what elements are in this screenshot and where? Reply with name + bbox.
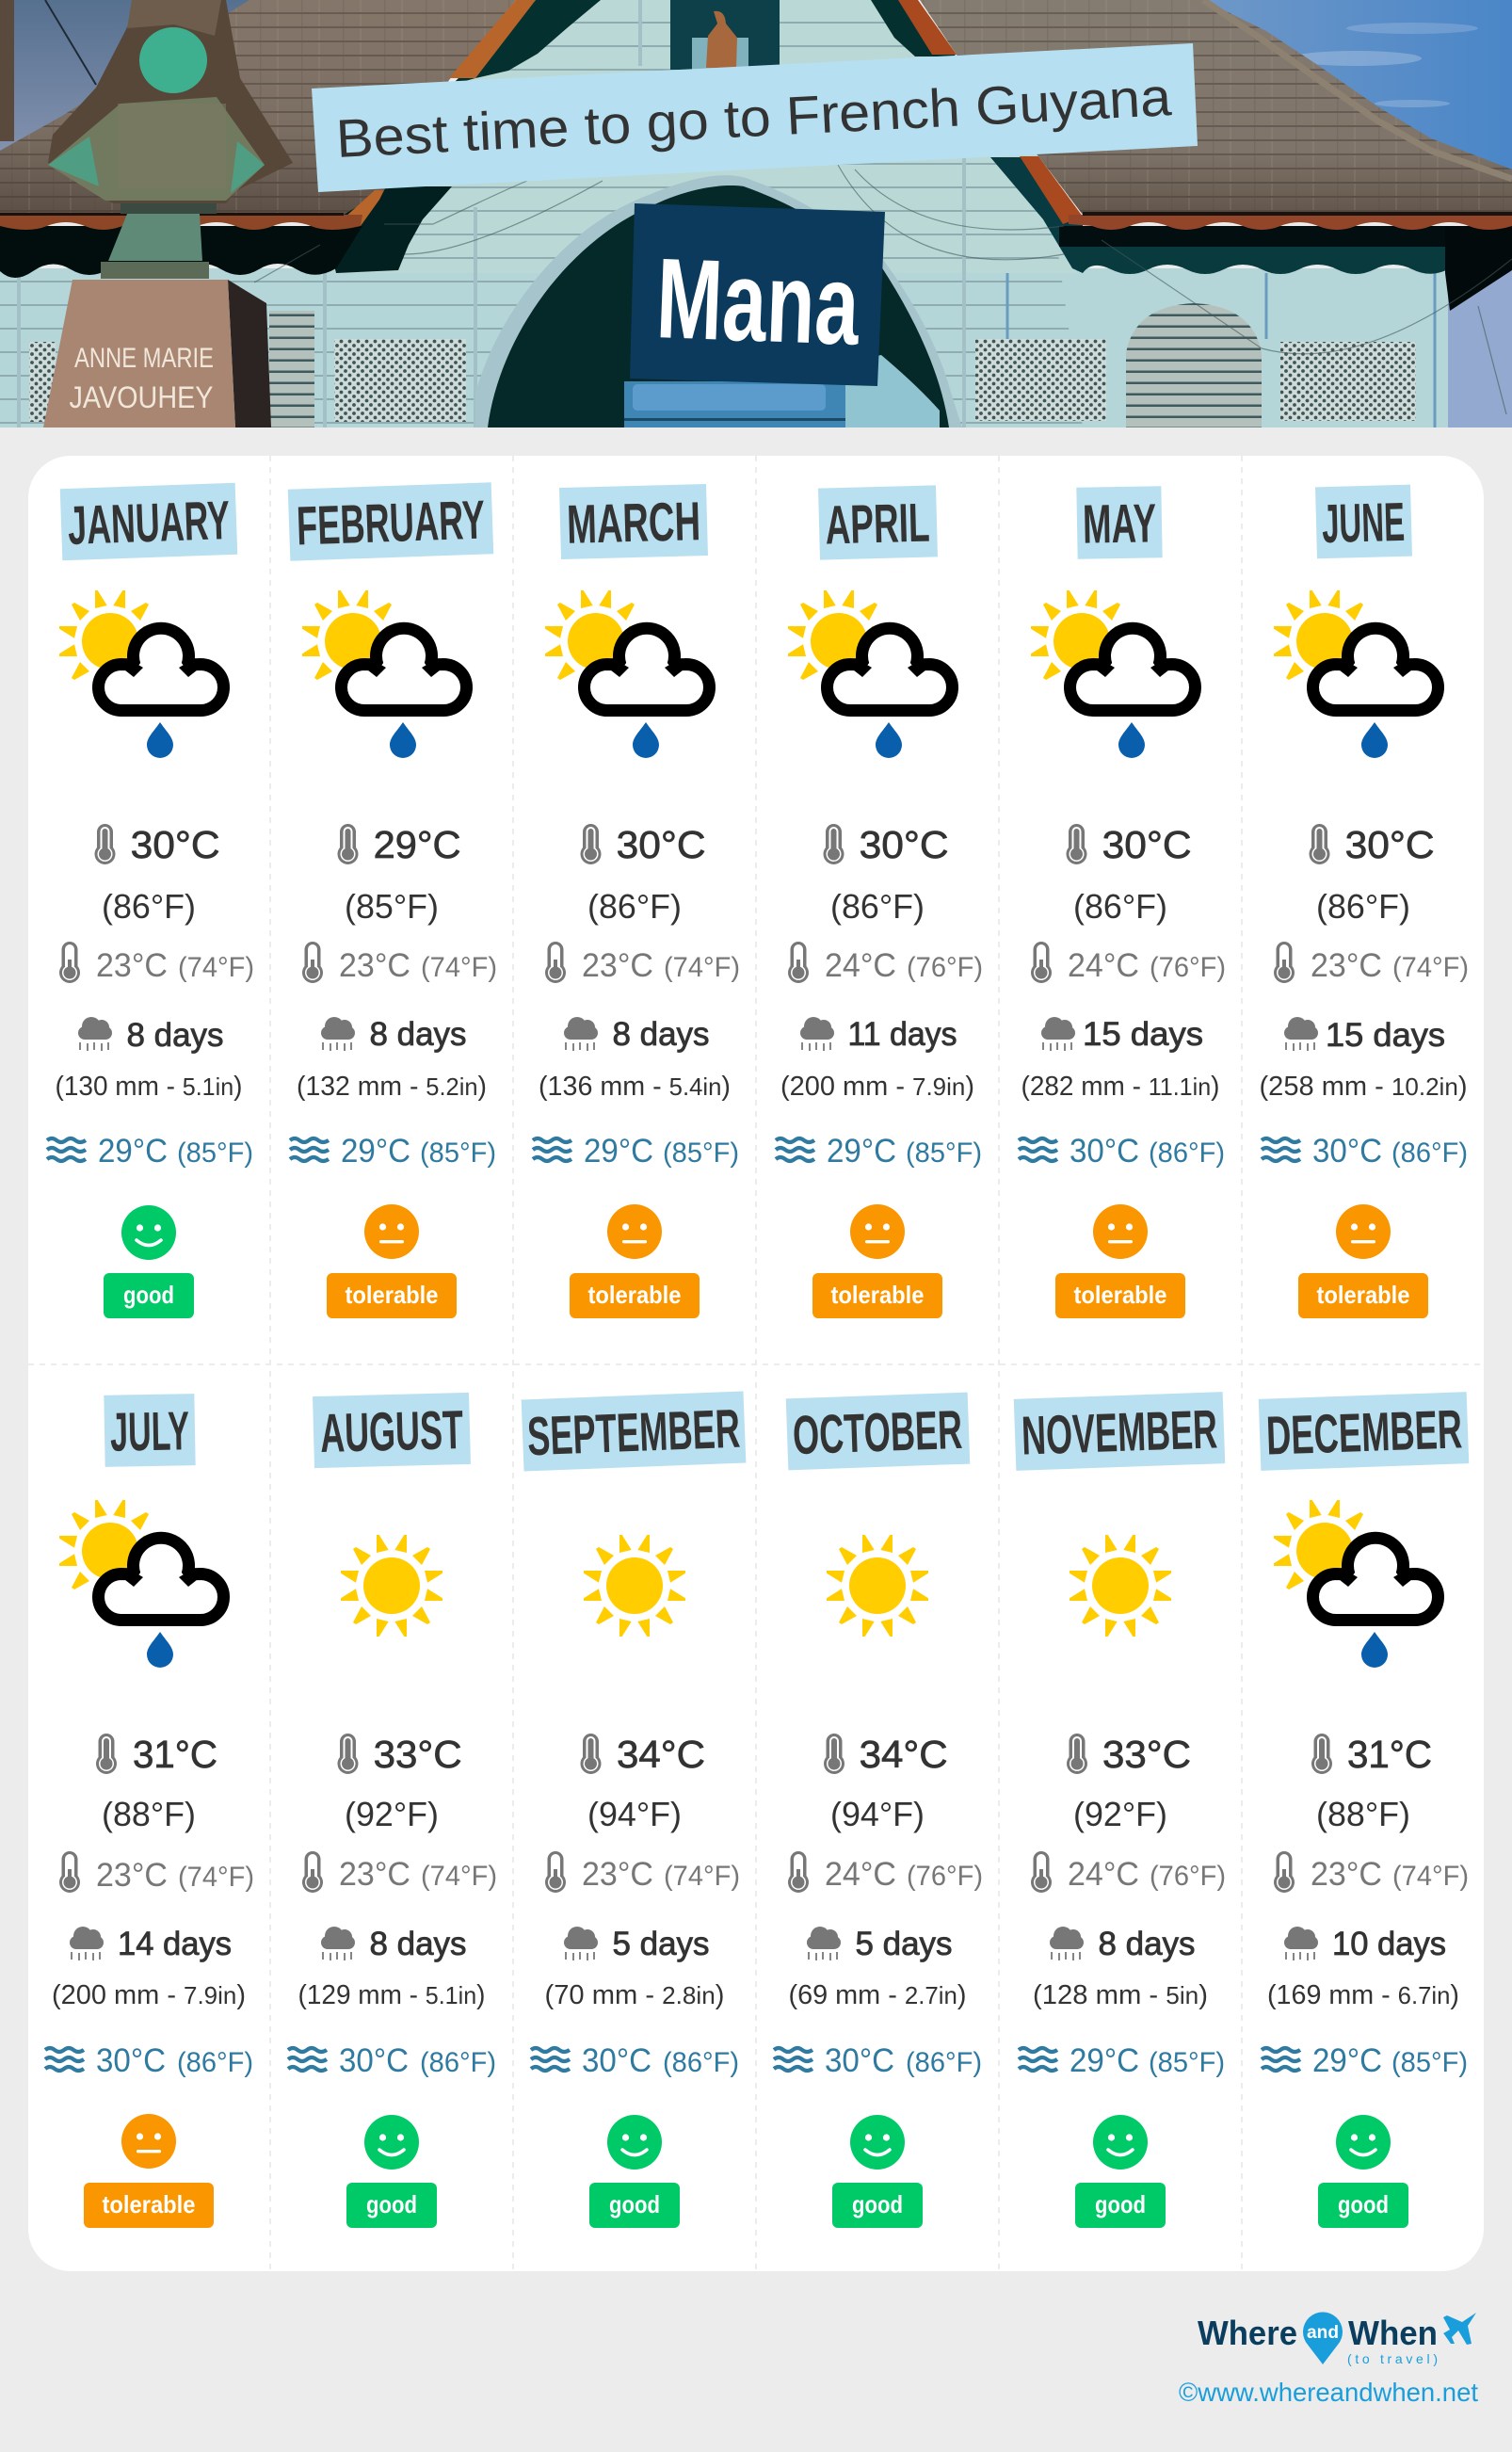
rain days: 8 days	[126, 1017, 224, 1054]
icon: sun	[1070, 1535, 1171, 1637]
sea temperature: 29°C	[341, 1133, 410, 1170]
low temperature: (74°F)	[664, 1861, 740, 1892]
sea temperature: (85°F)	[177, 1137, 253, 1169]
low temperature: (74°F)	[421, 952, 497, 983]
month: April	[776, 485, 983, 1318]
high temperature	[823, 823, 949, 926]
rain days	[321, 1926, 467, 1962]
rain days	[70, 1926, 232, 1962]
low temperature: 23°C	[582, 1856, 653, 1893]
header photo: church of Mana with statue: JAVOUHEY	[70, 380, 213, 414]
heading: March: MARCH	[566, 491, 701, 556]
high temperature: (86°F)	[102, 887, 196, 926]
rainfall: (69 mm - 2.7in)	[788, 1980, 966, 2010]
logo: Where and When: (to travel)	[1347, 2351, 1438, 2366]
low temperature: (74°F)	[178, 1862, 254, 1893]
heading: February	[288, 482, 493, 561]
sea temperature: (85°F)	[906, 1137, 982, 1169]
icon: sun	[584, 1535, 685, 1637]
heading: July	[104, 1394, 196, 1467]
heading: July: JULY	[109, 1400, 190, 1463]
sea temperature	[1262, 1133, 1468, 1170]
rainfall: (200 mm - 7.9in)	[52, 1980, 246, 2010]
location label: Mana: Mana	[654, 234, 862, 369]
low temperature	[545, 942, 740, 984]
sea temperature: (86°F)	[906, 2047, 982, 2078]
low temperature: 24°C	[1068, 1856, 1139, 1893]
rating: good	[104, 1205, 194, 1318]
logo: Where and When: When	[1348, 2314, 1438, 2352]
rain days: 15 days	[1083, 1016, 1203, 1053]
orange fascia	[344, 0, 536, 226]
heading: September: SEPTEMBER	[526, 1398, 741, 1467]
low temperature: 23°C	[339, 947, 410, 984]
month: August	[288, 1393, 497, 2228]
rating: tolerable	[327, 1204, 457, 1318]
rain days	[321, 1016, 467, 1053]
heading: February: FEBRUARY	[296, 490, 486, 557]
icon: sun, cloud and rain	[1031, 590, 1196, 758]
month: February	[288, 482, 497, 1318]
title banner: Best time to go to French Guyana	[334, 67, 1173, 169]
sea temperature: 30°C	[1312, 1133, 1382, 1170]
rainfall: (169 mm - 6.7in)	[1267, 1980, 1459, 2010]
header photo: church of Mana with statue	[0, 0, 1512, 427]
sea temperature	[531, 2042, 739, 2079]
high temperature: (85°F)	[345, 887, 439, 926]
sea temperature	[1019, 2042, 1225, 2079]
heading: May	[1076, 486, 1163, 559]
low temperature: 24°C	[1068, 947, 1139, 984]
logo: Where and When: Where	[1198, 2314, 1297, 2352]
icon: sun, cloud and rain	[1274, 590, 1439, 758]
high temperature: 30°C	[860, 823, 949, 866]
high temperature	[96, 1733, 217, 1833]
low temperature: (74°F)	[178, 952, 254, 983]
location label: Mana	[630, 203, 885, 386]
sea temperature: 29°C	[584, 1133, 653, 1170]
sea temperature: (86°F)	[420, 2047, 496, 2078]
logo: Where and When	[1198, 2312, 1476, 2366]
rain days: 11 days	[847, 1016, 957, 1053]
rating: good	[589, 2115, 680, 2228]
low temperature	[59, 942, 254, 984]
low temperature	[302, 942, 497, 984]
high temperature: (88°F)	[102, 1795, 196, 1833]
rating: tolerable	[570, 1204, 700, 1318]
high temperature	[94, 823, 220, 926]
heading: October	[786, 1393, 970, 1470]
sea temperature: 29°C	[1070, 2042, 1139, 2079]
month: January	[47, 483, 254, 1318]
rainfall: (136 mm - 5.4in)	[539, 1072, 731, 1102]
high temperature: (86°F)	[1316, 887, 1410, 926]
low temperature: (74°F)	[664, 952, 740, 983]
rain days	[78, 1017, 224, 1054]
icon: sun, cloud and rain	[788, 590, 953, 758]
sea temperature: 29°C	[1312, 2042, 1382, 2079]
month: November	[1014, 1392, 1226, 2228]
sea temperature: (85°F)	[1149, 2047, 1225, 2078]
sea temperature	[288, 2042, 496, 2079]
roofs	[0, 0, 516, 215]
rating: good	[346, 2115, 437, 2228]
heading: September	[522, 1391, 746, 1472]
heading: November: NOVEMBER	[1021, 1398, 1218, 1467]
high temperature: (94°F)	[830, 1795, 925, 1833]
rainfall: (258 mm - 10.2in)	[1260, 1072, 1467, 1102]
rain days: 5 days	[855, 1926, 953, 1962]
high temperature: 33°C	[1102, 1733, 1191, 1776]
high temperature	[580, 1733, 705, 1833]
high temperature: 34°C	[617, 1733, 705, 1776]
high temperature: (92°F)	[1073, 1795, 1167, 1833]
low temperature	[788, 942, 983, 984]
pedestal	[228, 280, 271, 427]
month: December	[1259, 1392, 1469, 2228]
sea temperature	[47, 1133, 253, 1170]
low temperature: (76°F)	[907, 952, 983, 983]
high temperature: (92°F)	[345, 1795, 439, 1833]
icon: plane	[1443, 2313, 1476, 2345]
icon: sun, cloud and rain	[545, 590, 710, 758]
high temperature: 30°C	[131, 823, 220, 866]
heading: August: AUGUST	[319, 1399, 464, 1464]
heading: April: APRIL	[825, 492, 930, 556]
high temperature: 31°C	[133, 1733, 217, 1776]
icon: map pin	[1303, 2312, 1343, 2364]
eave shadows	[0, 226, 362, 278]
low temperature	[1274, 942, 1469, 984]
low temperature	[545, 1851, 740, 1893]
high temperature: (86°F)	[1073, 887, 1167, 926]
windows	[334, 339, 466, 422]
low temperature: (74°F)	[1392, 952, 1469, 983]
arch and door	[475, 175, 962, 427]
high temperature: 30°C	[617, 823, 706, 866]
heading: October: OCTOBER	[792, 1399, 963, 1466]
rating: good	[1318, 2115, 1408, 2228]
low temperature: (74°F)	[1392, 1861, 1469, 1892]
low temperature	[59, 1851, 254, 1894]
low temperature: (76°F)	[1150, 952, 1226, 983]
sea temperature: (85°F)	[420, 1137, 496, 1169]
high temperature	[337, 1733, 462, 1833]
calendar card	[28, 456, 1484, 2271]
sea temperature	[774, 2042, 982, 2079]
low temperature	[302, 1851, 497, 1893]
month: September	[522, 1391, 746, 2228]
rainfall: (129 mm - 5.1in)	[298, 1980, 486, 2010]
high temperature: (88°F)	[1316, 1795, 1410, 1833]
header photo: church of Mana with statue: ANNE MARIE	[74, 343, 214, 374]
high temperature	[824, 1733, 948, 1833]
sea temperature	[1019, 1133, 1225, 1170]
sea temperature: 30°C	[582, 2042, 651, 2079]
wall	[0, 268, 1448, 427]
sea temperature: 30°C	[96, 2042, 166, 2079]
sea temperature: (85°F)	[663, 1137, 739, 1169]
sea temperature: 29°C	[98, 1133, 168, 1170]
high temperature: 29°C	[374, 823, 461, 866]
icon: sun	[341, 1535, 442, 1637]
rain days	[1050, 1926, 1196, 1962]
rating: good	[832, 2115, 923, 2228]
sea temperature: (85°F)	[1391, 2047, 1468, 2078]
high temperature	[1311, 1733, 1432, 1833]
high temperature	[1066, 823, 1192, 926]
sea temperature	[45, 2042, 253, 2079]
title banner	[312, 43, 1198, 192]
heading: June	[1315, 485, 1412, 558]
low temperature: 23°C	[1311, 947, 1382, 984]
icon: map pin: and	[1307, 2323, 1339, 2343]
high temperature: 33°C	[374, 1733, 462, 1776]
rain days	[1284, 1926, 1446, 1962]
statue bust	[48, 0, 293, 203]
low temperature: 23°C	[96, 1857, 168, 1894]
sea temperature: (86°F)	[177, 2047, 253, 2078]
sea temperature: (86°F)	[1149, 1137, 1225, 1169]
website credit: ©www.whereandwhen.net	[1179, 2378, 1478, 2407]
icon: sun	[827, 1535, 928, 1637]
month: July	[45, 1394, 254, 2228]
rain days: 8 days	[369, 1016, 467, 1053]
low temperature: 23°C	[582, 947, 653, 984]
roof shadows on wall	[452, 0, 601, 85]
low temperature: (74°F)	[421, 1861, 497, 1892]
high temperature: (86°F)	[587, 887, 682, 926]
high temperature: 31°C	[1347, 1733, 1432, 1776]
high temperature: (94°F)	[587, 1795, 682, 1833]
heading: June: JUNE	[1321, 492, 1406, 555]
low temperature: (76°F)	[1150, 1861, 1226, 1892]
low temperature: (76°F)	[907, 1861, 983, 1892]
sea temperature: 30°C	[339, 2042, 409, 2079]
rain days: 10 days	[1332, 1926, 1446, 1962]
sea temperature: 29°C	[827, 1133, 896, 1170]
rating: tolerable	[812, 1204, 942, 1318]
heading: March	[559, 484, 708, 559]
rainfall: (70 mm - 2.8in)	[544, 1980, 724, 2010]
rainfall: (132 mm - 5.2in)	[297, 1072, 487, 1102]
month: March	[533, 484, 740, 1318]
string lights	[254, 165, 1512, 414]
sky	[0, 0, 282, 160]
month: June	[1260, 485, 1469, 1318]
icon: sun, cloud and rain	[302, 590, 467, 758]
high temperature	[1309, 823, 1435, 926]
scalloped eaves	[0, 215, 362, 230]
rain days: 5 days	[612, 1926, 710, 1962]
rain days: 15 days	[1326, 1017, 1445, 1054]
low temperature: 23°C	[339, 1856, 410, 1893]
rating: tolerable	[1298, 1204, 1428, 1318]
high temperature: (86°F)	[830, 887, 925, 926]
sea temperature: 30°C	[825, 2042, 894, 2079]
month: May	[1019, 486, 1226, 1318]
rainfall: (200 mm - 7.9in)	[780, 1072, 974, 1102]
low temperature	[1031, 1851, 1226, 1893]
rain days: 8 days	[369, 1926, 467, 1962]
heading: January	[60, 483, 237, 560]
rating: good	[1075, 2115, 1166, 2228]
sea temperature	[533, 1133, 739, 1170]
rating: tolerable	[84, 2114, 214, 2228]
low temperature	[1031, 942, 1226, 984]
icon: sun, cloud and rain	[1274, 1500, 1439, 1668]
low temperature	[788, 1851, 983, 1893]
high temperature	[1067, 1733, 1191, 1833]
sea temperature: 30°C	[1070, 1133, 1139, 1170]
rain days: 8 days	[1098, 1926, 1196, 1962]
high temperature	[580, 823, 706, 926]
low temperature	[1274, 1851, 1469, 1893]
low temperature: 23°C	[96, 947, 168, 984]
heading: May: MAY	[1082, 492, 1157, 556]
rain days: 14 days	[118, 1926, 232, 1962]
sea temperature	[1262, 2042, 1468, 2079]
rain days	[564, 1926, 710, 1962]
icon: sun, cloud and rain	[59, 1500, 223, 1668]
sea temperature	[290, 1133, 496, 1170]
rainfall: (130 mm - 5.1in)	[55, 1072, 243, 1102]
rating: tolerable	[1055, 1204, 1185, 1318]
heading: April	[818, 485, 938, 560]
heading: November	[1014, 1392, 1225, 1471]
heading: August	[313, 1393, 471, 1468]
rainfall: (128 mm - 5in)	[1033, 1980, 1208, 2010]
high temperature	[337, 823, 461, 926]
high temperature: 34°C	[860, 1733, 948, 1776]
sea temperature: (86°F)	[663, 2047, 739, 2078]
rain days: 8 days	[612, 1016, 710, 1053]
sea temperature: (86°F)	[1391, 1137, 1468, 1169]
rain days	[800, 1016, 957, 1053]
low temperature: 23°C	[1311, 1856, 1382, 1893]
low temperature: 24°C	[825, 947, 896, 984]
low temperature: 24°C	[825, 1856, 896, 1893]
icon: sun, cloud and rain	[59, 590, 223, 758]
rainfall: (282 mm - 11.1in)	[1021, 1072, 1220, 1102]
month: October	[774, 1393, 983, 2228]
rain days	[564, 1016, 710, 1053]
rain days	[807, 1926, 953, 1962]
high temperature: 30°C	[1102, 823, 1192, 866]
high temperature: 30°C	[1345, 823, 1435, 866]
heading: January: JANUARY	[67, 490, 231, 557]
sea temperature	[776, 1133, 982, 1170]
niche with figure	[670, 0, 780, 70]
